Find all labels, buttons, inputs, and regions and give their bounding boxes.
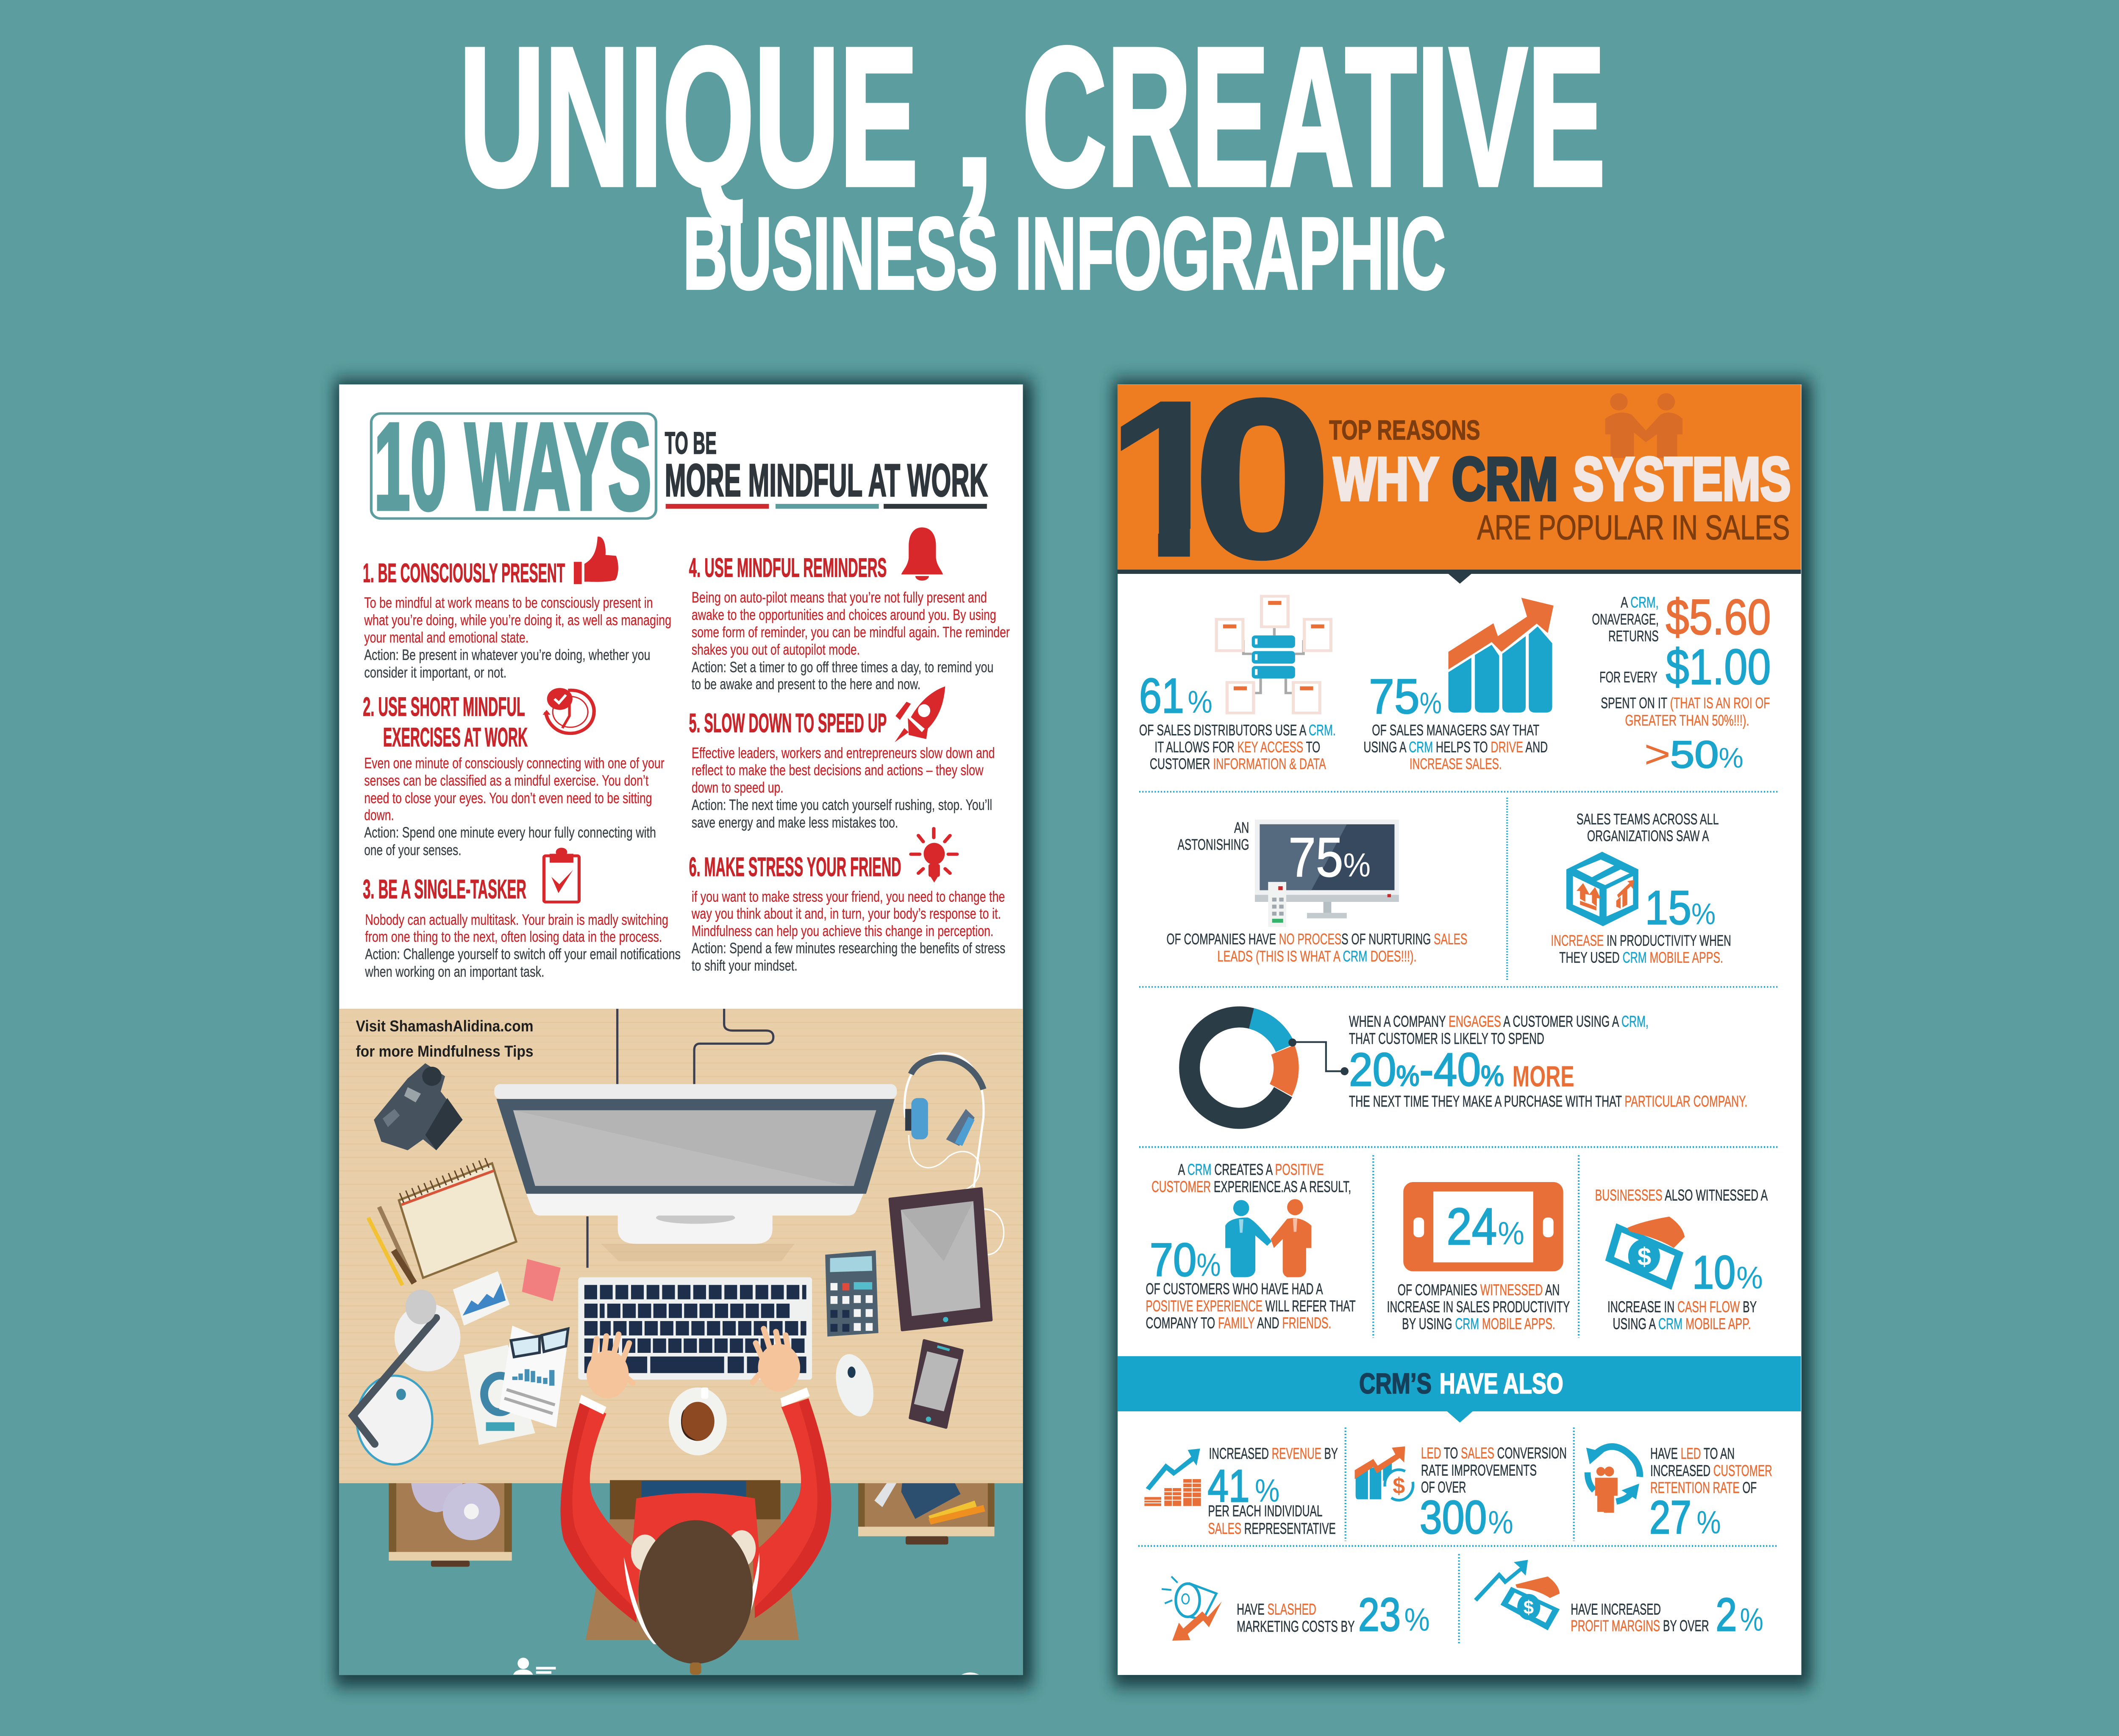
section 2: EXERCISES AT WORK (383, 722, 528, 752)
donut chart (1190, 1017, 1289, 1118)
stat: 75% managers (1363, 598, 1554, 773)
icon: rising chart (1449, 598, 1554, 712)
floor (339, 1483, 1023, 1675)
stat: 41% (1144, 1445, 1338, 1537)
section 4: shakes you out of autopilot mode. (692, 641, 860, 658)
stat: ROI: > (1644, 732, 1671, 776)
headphones (904, 1053, 984, 1189)
sticky note (522, 1259, 561, 1301)
stat: 41%: % (1255, 1473, 1279, 1509)
section 5 (689, 686, 995, 831)
desk surface (339, 1009, 1023, 1483)
subtitle: BUSINESS INFOGRAPHIC (683, 197, 1446, 311)
stat: 15%: ORGANIZATIONS SAW A (1587, 828, 1709, 845)
stat: 27%: RETENTION RATE OF (1650, 1479, 1757, 1497)
section 6: Action: Spend a few minutes researching the benefits of stress (692, 940, 1005, 956)
tablet (890, 1188, 1004, 1330)
heading: to be more mindful at work: MORE MINDFUL AT WORK (665, 455, 988, 506)
stat: 41%: PER EACH INDIVIDUAL (1208, 1502, 1322, 1520)
title: CREATIVE (1022, 7, 1605, 227)
heading: 10 ways (371, 398, 656, 536)
stat: 70%: % (1196, 1247, 1221, 1283)
icon: arrow and cash (1474, 1560, 1560, 1630)
stat: 23%: 23 (1358, 1589, 1401, 1641)
section 5: down to speed up. (692, 779, 784, 796)
left panel text: 10 WAYS (374, 398, 652, 536)
section 1: consider it important, or not. (364, 664, 506, 681)
stat: 61%: % (1188, 684, 1212, 719)
stat: 300%: LED TO SALES CONVERSION (1421, 1444, 1567, 1462)
stat: 10%: 10 (1692, 1246, 1735, 1299)
calculator (825, 1250, 879, 1336)
section 2: Action: Spend one minute every hour fully connecting with (364, 824, 656, 841)
stat: 20%-40%: 20%-40% (1349, 1044, 1504, 1096)
header band: CRM (1452, 445, 1558, 513)
section 2: down. (364, 807, 394, 823)
lamp (353, 1290, 460, 1464)
icon: clipboard (544, 848, 579, 902)
stat: 61%: IT ALLOWS FOR KEY ACCESS TO (1154, 739, 1320, 756)
icon: cash in hand (1605, 1217, 1685, 1290)
section 6: way you think about it and, in turn, your body’s response to it. (691, 905, 1001, 922)
website note: for more Mindfulness Tips (356, 1042, 534, 1060)
stat: ROI: A CRM, (1621, 594, 1659, 611)
section 3: Action: Challenge yourself to switch off your email notifications (365, 946, 681, 963)
band: CRM's have also (1118, 1356, 1801, 1422)
right drawer (858, 1483, 994, 1544)
section 5: 5. SLOW DOWN TO SPEED UP (689, 708, 887, 738)
stat: 24%: OF COMPANIES WITNESSED AN (1398, 1281, 1560, 1299)
stat: 27%: 27 (1649, 1491, 1691, 1544)
stat: ROI: FOR EVERY (1599, 669, 1657, 686)
keyboard (578, 1277, 812, 1380)
heading: to be more mindful at work (665, 426, 988, 509)
stat: 70%: OF CUSTOMERS WHO HAVE HAD A (1146, 1280, 1323, 1298)
stat: 75% managers: 75 (1369, 670, 1420, 724)
section 1: To be mindful at work means to be consciously present in (364, 594, 653, 611)
panel: 10 ways to be more mindful (339, 384, 1023, 1675)
stat: 70%: A CRM CREATES A POSITIVE (1178, 1161, 1324, 1178)
stat: 10%: USING A CRM MOBILE APP. (1613, 1315, 1751, 1333)
panel: why CRM systems (1105, 353, 1802, 1675)
stat: astonishing 75%: % (1343, 846, 1371, 884)
stat: 61% (1139, 596, 1336, 773)
stat: 23%: HAVE SLASHED (1237, 1600, 1316, 1618)
stat: 300%: RATE IMPROVEMENTS (1421, 1461, 1537, 1479)
icon: retention cycle (1586, 1447, 1640, 1513)
stat: 70%: POSITIVE EXPERIENCE WILL REFER THAT (1146, 1297, 1356, 1315)
icon: cash in hand: $ (1638, 1243, 1651, 1271)
stat: 24% (1387, 1182, 1570, 1333)
section 2: senses can be classified as a mindful exercise. You don’t (364, 772, 648, 789)
stat: 15%: INCREASE IN PRODUCTIVITY WHEN (1551, 932, 1731, 949)
person (561, 1329, 831, 1675)
header band: WHY (1334, 445, 1439, 513)
stat: 10%: BUSINESSES ALSO WITNESSED A (1595, 1186, 1768, 1204)
stat: ROI (1592, 589, 1771, 776)
title (459, 7, 1605, 228)
panel shadows (334, 379, 1811, 1687)
section 4: Being on auto-pilot means that you’re not fully present and (692, 589, 987, 606)
stat: 2%: HAVE INCREASED (1571, 1600, 1661, 1618)
stat: astonishing 75%: LEADS (THIS IS WHAT A CRM DOES!!!). (1217, 948, 1417, 965)
stat: 70%: 70 (1150, 1234, 1196, 1286)
stat: 23% (1162, 1577, 1430, 1641)
stat: ROI: $5.60 (1666, 589, 1771, 645)
section 3: from one thing to the next, often losing data in the process. (365, 928, 662, 945)
stat: 2%: % (1740, 1602, 1763, 1638)
illustration: desk scene (339, 1009, 1023, 1675)
icon: rocket (895, 686, 945, 742)
section 1 (363, 537, 671, 681)
upper half of CRM panel (1105, 353, 1801, 987)
section 2: one of your senses. (364, 842, 462, 858)
section 5: save energy and make less mistakes too. (692, 814, 898, 831)
stat: 20%-40%: THAT CUSTOMER IS LIKELY TO SPEND (1349, 1030, 1544, 1047)
title: UNIQUE (459, 7, 918, 227)
section 1: what you’re doing, while you’re doing it, as well as managing (364, 612, 671, 629)
icon: conversion chart: $ (1393, 1473, 1405, 1499)
stat: 15% (1551, 811, 1731, 966)
stat: 24%: BY USING CRM MOBILE APPS. (1402, 1315, 1555, 1333)
section 3: 3. BE A SINGLE-TASKER (363, 874, 526, 904)
stat: 10% (1595, 1186, 1768, 1333)
stat: 75% managers: INCREASE SALES. (1410, 756, 1502, 773)
stat: 300% (1355, 1444, 1567, 1544)
stat: 15%: 15 (1645, 881, 1691, 935)
stat: 10%: % (1736, 1260, 1763, 1295)
stat: 300%: % (1488, 1505, 1513, 1541)
icon: megaphone and falling arrow (1162, 1577, 1222, 1641)
stat: 27%: INCREASED CUSTOMER (1650, 1462, 1772, 1480)
stat: ROI: GREATER THAN 50%!!!). (1625, 712, 1749, 729)
stat: ROI: RETURNS (1608, 628, 1659, 645)
stat: 61%: OF SALES DISTRIBUTORS USE A CRM. (1139, 722, 1336, 739)
section 4: to be awake and present to the here and now. (692, 676, 920, 693)
section 2: Even one minute of consciously connecting with one of your (364, 755, 665, 771)
stat: ROI: $1.00 (1666, 639, 1771, 695)
stat: astonishing 75%: 75 (1288, 826, 1343, 888)
stat: 61%: CUSTOMER INFORMATION & DATA (1150, 756, 1326, 773)
section 3 (363, 848, 681, 980)
left drawer (389, 1483, 512, 1567)
monitor (494, 1084, 897, 1261)
lower half of CRM panel (1118, 1013, 1801, 1645)
stat: astonishing 75%: AN (1234, 819, 1249, 837)
stat: 70% (1146, 1161, 1356, 1332)
stat: 70%: COMPANY TO FAMILY AND FRIENDS. (1146, 1314, 1331, 1332)
notepad and pencils (368, 1161, 516, 1285)
icon: handshake silhouette (1605, 393, 1682, 458)
stat: 41%: 41 (1207, 1460, 1249, 1511)
stat: 10%: INCREASE IN CASH FLOW BY (1607, 1298, 1757, 1316)
icon: light bulb (911, 829, 957, 882)
section 5: Effective leaders, workers and entrepreneurs slow down and (692, 745, 995, 761)
stat: 15%: % (1691, 897, 1716, 931)
website note (356, 1017, 534, 1060)
stat: 2% (1474, 1560, 1763, 1641)
stat: 20%-40% (1190, 1013, 1747, 1118)
header band (1105, 353, 1801, 605)
stat: ROI: % (1719, 743, 1744, 774)
section 4: some form of reminder, you can be mindful again. The reminder (692, 624, 1010, 640)
stat: 61%: 61 (1139, 669, 1184, 723)
stat: 2%: 2 (1716, 1589, 1737, 1641)
stat: astonishing 75%: OF COMPANIES HAVE NO PROCESS OF NURTURING SALES (1167, 931, 1467, 948)
icon: conversion chart (1355, 1447, 1413, 1500)
band: CRM's have also: CRM’S (1359, 1368, 1432, 1400)
icon: monitor and remote (1255, 820, 1399, 927)
icon: box (1566, 852, 1638, 926)
stat: 27% (1586, 1445, 1772, 1544)
section 1: your mental and emotional state. (364, 629, 528, 646)
papers and glasses (464, 1326, 568, 1445)
section 2: 2. USE SHORT MINDFUL (363, 692, 525, 722)
stat: 41%: INCREASED REVENUE BY (1209, 1445, 1338, 1462)
stat: 15%: SALES TEAMS ACROSS ALL (1577, 811, 1719, 828)
header band: ARE POPULAR IN SALES (1477, 509, 1790, 547)
stat: 15%: THEY USED CRM MOBILE APPS. (1559, 949, 1723, 966)
icon: arrow and cash: $ (1524, 1597, 1534, 1618)
icon: clock (542, 688, 594, 733)
stat: 300%: 300 (1420, 1491, 1487, 1544)
stat: 75% managers: USING A CRM HELPS TO DRIVE AND (1363, 739, 1548, 756)
section 5: reflect to make the best decisions and actions – they slow (692, 762, 984, 779)
section 1: 1. BE CONSCIOUSLY PRESENT (363, 558, 565, 588)
stat: 41%: SALES REPRESENTATIVE (1208, 1520, 1336, 1537)
big 10: 0 (1193, 353, 1331, 605)
camera (374, 1063, 463, 1150)
stat: 23%: MARKETING COSTS BY (1237, 1618, 1355, 1635)
big 10 (1105, 353, 1331, 605)
header band: TOP REASONS (1329, 415, 1480, 445)
coffee cup (669, 1388, 727, 1455)
stat: astonishing 75%: ASTONISHING (1178, 836, 1249, 853)
section 2 (363, 688, 665, 858)
stat: 27%: % (1696, 1505, 1721, 1541)
section 6 (689, 829, 1005, 974)
section 6: Mindfulness can help you achieve this change in perception. (692, 923, 993, 939)
chart card (453, 1271, 510, 1326)
icon: handshake (1225, 1199, 1311, 1277)
stat: 75% managers: OF SALES MANAGERS SAY THAT (1372, 722, 1539, 739)
section 4: awake to the opportunities and choices around you. By using (692, 606, 996, 623)
section 6: if you want to make stress your friend, you need to change the (692, 888, 1005, 905)
band: CRM's have also: HAVE ALSO (1440, 1368, 1563, 1400)
big 10: 1 (1105, 353, 1233, 605)
section 4 (689, 527, 1010, 693)
stat: 24%: % (1498, 1216, 1524, 1252)
section 3: when working on an important task. (365, 963, 545, 980)
floor icons (513, 1658, 979, 1675)
stat: 27%: HAVE LED TO AN (1650, 1445, 1735, 1462)
stat: ROI: SPENT ON IT (THAT IS AN ROI OF (1601, 695, 1770, 712)
phone (910, 1341, 962, 1427)
cables (587, 1009, 773, 1268)
stat: 2%: PROFIT MARGINS BY OVER (1571, 1617, 1709, 1635)
section 1: Action: Be present in whatever you’re doing, whether you (364, 647, 650, 663)
website note: Visit ShamashAlidina.com (356, 1017, 534, 1035)
stat: 20%-40%: THE NEXT TIME THEY MAKE A PURCHASE WITH THAT PARTICULAR COMPANY. (1349, 1093, 1747, 1110)
stat: ROI: 50 (1670, 733, 1719, 776)
icon: server network (1216, 596, 1331, 713)
icon: bell (901, 527, 943, 581)
stat: 24%: 24 (1446, 1197, 1497, 1255)
section 4: 4. USE MINDFUL REMINDERS (689, 553, 887, 583)
stat: 75% managers: % (1420, 686, 1442, 720)
section 6: 6. MAKE STRESS YOUR FRIEND (689, 852, 901, 882)
mouse (830, 1350, 879, 1420)
icon: thumbs up (574, 537, 618, 584)
header band: SYSTEMS (1574, 445, 1791, 513)
heading: to be more mindful at work: TO BE (665, 426, 717, 461)
stat: ROI: ONAVERAGE, (1592, 611, 1659, 628)
stat: 300%: OF OVER (1421, 1478, 1466, 1496)
stat: 24%: INCREASE IN SALES PRODUCTIVITY (1387, 1298, 1570, 1316)
stat: 20%-40%: MORE (1513, 1060, 1574, 1093)
section 3: Nobody can actually multitask. Your brain is madly switching (365, 911, 668, 928)
stat: 70%: CUSTOMER EXPERIENCE.AS A RESULT, (1151, 1178, 1351, 1195)
section 6: to shift your mindset. (692, 957, 798, 974)
icon: coins and arrow (1144, 1449, 1201, 1506)
section 4: Action: Set a timer to go off three times a day, to remind you (692, 659, 993, 676)
stat: 23%: % (1404, 1602, 1430, 1638)
stat: 20%-40%: WHEN A COMPANY ENGAGES A CUSTOMER USING A CRM, (1349, 1013, 1649, 1030)
icon: mobile phone (1403, 1182, 1563, 1271)
section 5: Action: The next time you catch yourself rushing, stop. You’ll (692, 796, 992, 813)
stat: astonishing 75% (1167, 819, 1467, 965)
left panel text (363, 398, 1010, 980)
section 2: need to close your eyes. You don’t even need to be sitting (364, 790, 652, 807)
title: , (951, 8, 998, 228)
